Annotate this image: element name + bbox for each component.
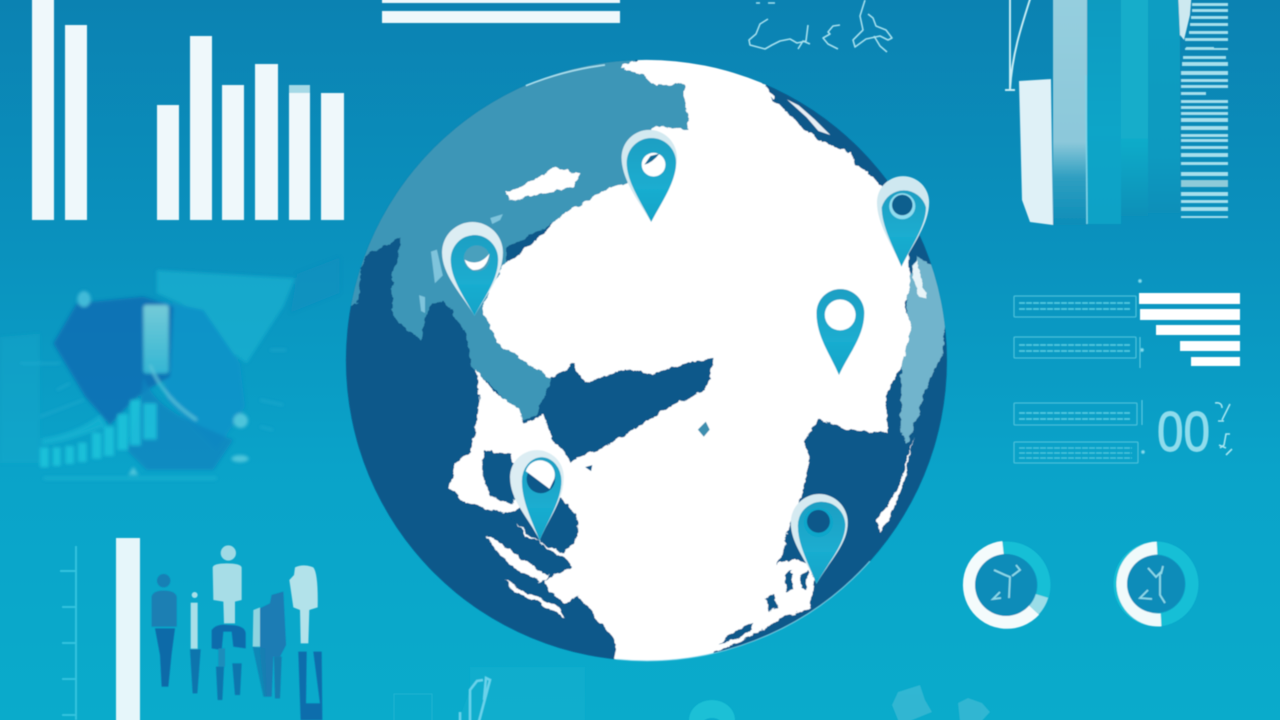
bar 4 (1121, 0, 1148, 216)
text box outlines (1014, 296, 1138, 463)
counter squiggles (1215, 403, 1232, 455)
pin: north (622, 130, 677, 222)
dark upper-right band (290, 257, 340, 313)
donut chart right (1120, 548, 1192, 620)
globe rim highlight (526, 65, 605, 86)
dots (233, 413, 248, 428)
bottom centre faint chart (394, 667, 585, 720)
figure 1 dark (152, 574, 177, 687)
tall white bar (116, 538, 140, 720)
western islets (419, 214, 503, 313)
figure 2 thin (190, 592, 201, 693)
light strip east (901, 256, 949, 443)
pin: north east (877, 176, 929, 267)
sumatra island (486, 536, 550, 582)
lace dark spots south east (765, 570, 809, 611)
donut inner figure (1140, 566, 1165, 603)
right top chart (1005, 0, 1228, 225)
constellation map lines (749, 0, 892, 52)
small islets (698, 422, 710, 437)
teal fan (157, 270, 295, 363)
east sliver (876, 436, 913, 532)
light bar (1019, 79, 1053, 225)
left abstract dashboard graphic (0, 257, 340, 480)
dark sliver south (718, 623, 753, 644)
striped bar (1181, 3, 1228, 218)
dark shield (53, 297, 173, 425)
donut inner figure (993, 565, 1020, 599)
box four (1014, 442, 1138, 463)
dark lower bay (506, 497, 578, 554)
teal swoosh (42, 415, 107, 445)
light continent upper left (344, 58, 696, 422)
donut chart left (970, 548, 1044, 622)
bar 2 (1053, 0, 1087, 225)
island strip (504, 580, 565, 619)
pin: west (442, 222, 503, 316)
pin: east (816, 289, 864, 375)
bar top highlight (1178, 0, 1192, 40)
light column (143, 305, 169, 373)
horizontal white bars right (1139, 293, 1240, 366)
island chain (546, 564, 577, 604)
bar chart: six column chart (157, 36, 344, 220)
counter digits: 00 (1157, 400, 1210, 464)
figure 4 dark pair (253, 592, 286, 698)
pin: south west (510, 450, 564, 540)
white peninsula (450, 370, 581, 564)
figure 3 light (212, 545, 246, 700)
faint ticks (20, 350, 287, 430)
globe (344, 54, 949, 667)
curve line (1005, 0, 1033, 90)
small connector ticks (1138, 280, 1144, 454)
top centre header bars (382, 0, 620, 23)
bottom left scale axis (60, 546, 76, 720)
sliver at NE (911, 260, 927, 299)
globe ocean disc (346, 60, 947, 661)
mid blue area (157, 300, 245, 450)
inner bay (482, 451, 519, 505)
light arc (150, 365, 197, 420)
baseline (43, 477, 217, 480)
bottom pin tip (689, 700, 735, 720)
dark arc band (127, 377, 233, 470)
figure 5 light with dark legs (289, 565, 322, 720)
pin: south east (791, 494, 848, 584)
bottom right faint shapes (892, 685, 990, 720)
NE dark wedge (769, 97, 850, 154)
bar 3 (1087, 0, 1121, 224)
NE specks (786, 98, 831, 136)
box three (1014, 403, 1137, 425)
box one (1014, 296, 1136, 317)
stepped bars (40, 400, 157, 467)
bar 5 (1148, 0, 1180, 213)
island north west (505, 168, 581, 201)
people figures (152, 545, 322, 720)
bar chart: top left pair (32, 0, 87, 220)
box two (1014, 337, 1136, 358)
teal left panel (0, 333, 40, 463)
main white land (482, 54, 911, 667)
